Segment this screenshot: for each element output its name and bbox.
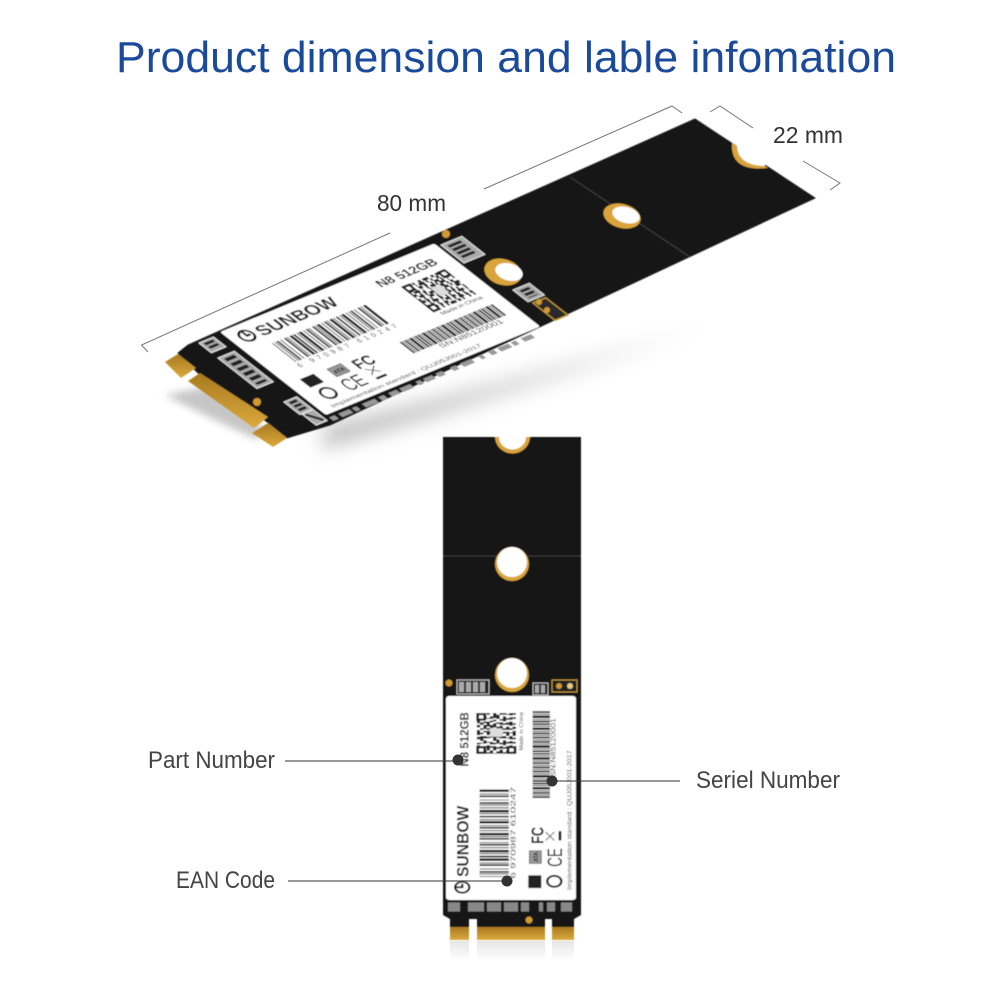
- certification marks: FC: [529, 827, 548, 844]
- certification marks: FC: [347, 352, 381, 372]
- EAN digits: 6 970987 610247: [294, 323, 400, 369]
- serial barcode: [533, 710, 549, 798]
- dimension: 80 mm: 80 mm: [377, 190, 446, 216]
- made in china: Made in China: [439, 295, 486, 316]
- callout: Seriel Number: [546, 767, 840, 794]
- QR code: [401, 269, 477, 312]
- certification marks: ATA: [332, 366, 348, 375]
- title: Product dimension and lable infomation: [116, 33, 896, 82]
- standard text: Implementation standard : QUJ05J001-2017: [567, 750, 574, 890]
- brand name: SUNBOW: [250, 294, 344, 339]
- brand logo: [455, 882, 469, 893]
- mounting hole: middle: [495, 547, 529, 581]
- brand logo: [235, 328, 259, 343]
- reflection under upright SSD: [450, 941, 574, 961]
- lower component strip: [331, 336, 533, 419]
- angled SSD board: [165, 119, 815, 447]
- part number: N8 512GB: [372, 256, 442, 290]
- serial text: SN:N85120001: [436, 318, 506, 350]
- callout: Part Number: Part Number: [148, 747, 275, 774]
- top component pads: [457, 680, 577, 695]
- solder points: [446, 680, 532, 924]
- product label: [220, 244, 540, 415]
- EAN barcode: [481, 789, 508, 877]
- panel seam: [570, 177, 690, 257]
- board body: [443, 437, 581, 940]
- drop shadow of angled SSD: [165, 318, 735, 448]
- connector pads: [450, 927, 574, 940]
- mounting hole: near: [495, 658, 529, 692]
- callout: EAN Code: EAN Code: [176, 867, 275, 894]
- upright SSD board: [443, 437, 581, 940]
- top notch: [495, 437, 530, 453]
- mounting hole: middle: [601, 199, 643, 233]
- callout: EAN Code: [176, 867, 512, 894]
- mounting hole: near: [481, 255, 525, 289]
- solder points: [253, 230, 450, 406]
- EAN barcode: [284, 314, 378, 353]
- product label: [446, 696, 576, 900]
- dimension: 80 mm: [142, 106, 682, 352]
- gold capacitor pad: [533, 298, 568, 320]
- connector pads: [165, 354, 287, 447]
- standard text: Implementation standard : QUJ05J001-2017: [330, 344, 484, 409]
- serial barcode: [407, 309, 500, 348]
- part number: N8 512GB: [459, 712, 472, 767]
- QR code: [476, 713, 516, 754]
- callout: Part Number: [148, 747, 464, 774]
- callout: Seriel Number: Seriel Number: [696, 767, 840, 794]
- serial text: SN:N85120001: [550, 717, 558, 777]
- certification marks: [300, 352, 397, 404]
- dimension: 22 mm: 22 mm: [773, 122, 843, 148]
- made in china: Made in China: [518, 712, 525, 750]
- certification marks: CE: [335, 371, 374, 395]
- panel seam: [443, 555, 581, 557]
- mounting notch: [732, 138, 770, 168]
- EAN digits: 6 970987 610247: [510, 786, 518, 879]
- brand name: SUNBOW: [455, 805, 473, 877]
- certification marks: [528, 827, 567, 888]
- certification marks: CE: [543, 848, 567, 867]
- certification marks: ATA: [534, 851, 540, 862]
- board body: [178, 119, 815, 438]
- bottom component pads: [448, 902, 572, 912]
- component pads: [199, 236, 544, 425]
- dimension: 22 mm: [710, 106, 843, 190]
